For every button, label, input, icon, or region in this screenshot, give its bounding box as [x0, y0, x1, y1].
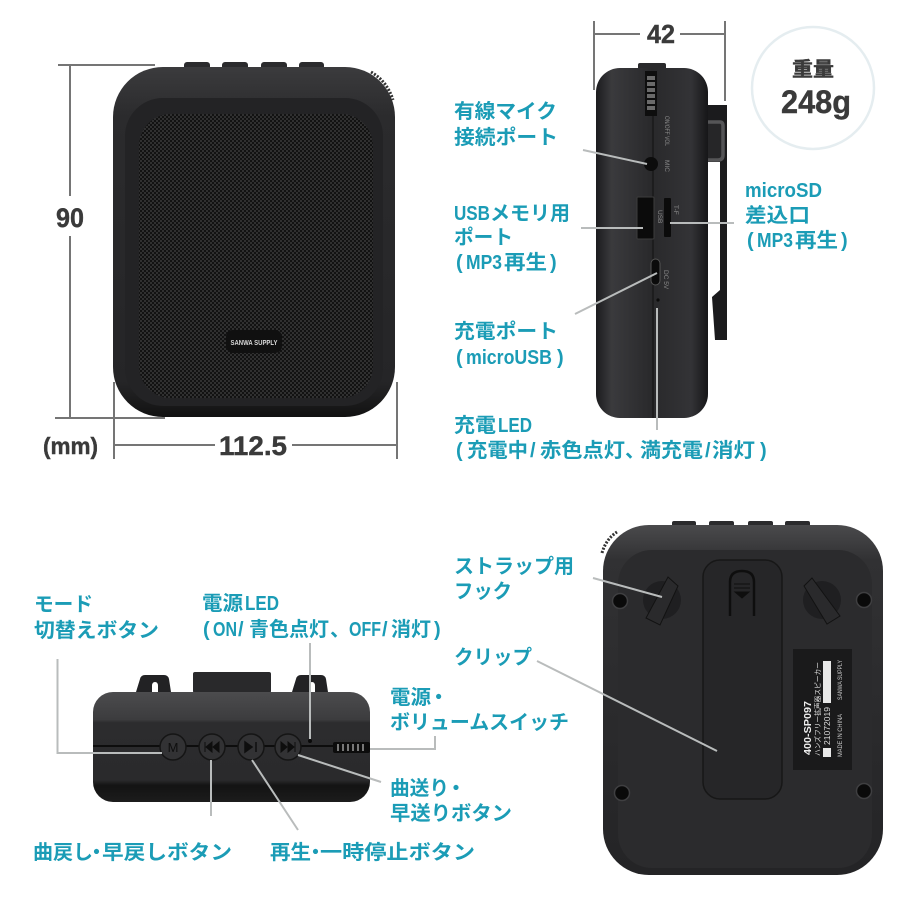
- callout: play pause button: 再生: [270, 841, 311, 864]
- callout: next button: [298, 755, 512, 825]
- side view: [594, 19, 727, 418]
- callout: mode button: [34, 594, 162, 753]
- belt clip: [703, 560, 782, 799]
- speaker side body: T-F: [672, 205, 679, 215]
- callout: charging LED: /: [530, 440, 536, 462]
- callout: power volume switch: ボリュームスイッチ: [390, 711, 569, 734]
- callout: previous button: 曲戻し: [33, 841, 93, 864]
- callout: play pause button: [252, 760, 475, 864]
- callout: next button: 早送りボタン: [390, 802, 512, 825]
- callout: clip: クリップ: [454, 646, 532, 669]
- mic jack: [644, 157, 658, 171]
- callout: power LED: OFF: [349, 619, 381, 641]
- button: mode: [160, 734, 186, 760]
- callout: USB memory port: ポート: [454, 226, 513, 249]
- callout: play pause button: 一時停止ボタン: [320, 841, 475, 864]
- speaker side body: USB: [656, 210, 663, 223]
- callout: charging LED: (: [456, 440, 463, 462]
- volume wheel: [645, 71, 657, 116]
- callout: charging LED: [454, 308, 767, 462]
- callout: strap hook: ストラップ用: [454, 555, 574, 578]
- callout: USB memory port: 再生: [504, 251, 547, 274]
- dimension: height 90: 90: [56, 203, 84, 233]
- callout: charging port: (: [456, 347, 463, 369]
- callout: power LED: 消灯: [391, 618, 431, 641]
- charge LED: [656, 298, 660, 302]
- dimension: width 112.5: [114, 382, 397, 461]
- speaker side body: [596, 63, 708, 418]
- callout: microSD slot: MP3: [757, 230, 793, 252]
- weight badge: [752, 27, 874, 149]
- button: previous: [199, 734, 225, 760]
- callout: power volume switch: ・: [429, 687, 449, 709]
- callout: power LED: (: [203, 619, 210, 641]
- callout: charging LED: 消灯: [712, 439, 755, 462]
- product label: [793, 649, 852, 770]
- callout: power LED: LED: [245, 593, 279, 615]
- callout: mode button: 切替えボタン: [34, 619, 159, 642]
- logo badge: [226, 330, 282, 353]
- callout: USB memory port: [454, 203, 643, 274]
- unit label mm: (mm): [43, 433, 98, 459]
- callout: USB memory port: MP3: [466, 252, 502, 274]
- weight badge: 重量: [792, 58, 834, 81]
- callout: power volume switch: 電源: [390, 686, 431, 709]
- callout: wired mic port: 有線マイク: [454, 100, 557, 123]
- callout: charging port: ): [557, 347, 564, 369]
- callout: microSD slot: microSD: [745, 180, 822, 202]
- callout: mode button: モード: [34, 594, 93, 616]
- callout: charging LED: ): [760, 440, 767, 462]
- product label: MADE IN CHINA: [837, 713, 844, 757]
- callout: microSD slot: ): [841, 230, 848, 252]
- USB port: [637, 197, 654, 239]
- callout: charging LED: 充電中: [467, 439, 528, 462]
- callout: power LED: 、: [330, 619, 350, 641]
- callout: wired mic port: [454, 100, 647, 164]
- callout: previous button: [33, 760, 232, 864]
- strap hooks: [643, 577, 841, 625]
- callout: power LED: /: [382, 619, 388, 641]
- power LED: [308, 739, 312, 743]
- callout: strap hook: [454, 555, 662, 603]
- strap hooks and clip top: [136, 672, 328, 693]
- callout: microSD slot: (: [747, 230, 754, 252]
- callout: charging LED: 充電: [454, 414, 496, 437]
- callout: USB memory port: ): [550, 252, 557, 274]
- callout: power LED: /: [238, 619, 244, 641]
- callout: next button: ・: [446, 778, 466, 800]
- back view: [602, 521, 883, 875]
- callout: power LED: ): [434, 619, 441, 641]
- logo badge: SANWA SUPPLY: [230, 338, 278, 347]
- top-edge view with buttons: [93, 672, 370, 802]
- callout: charging port: [454, 273, 657, 369]
- speaker side body: DC 5V: [662, 270, 669, 290]
- callout: charging port: microUSB: [466, 347, 552, 369]
- callout: charging LED: 赤色点灯: [540, 439, 625, 462]
- front view with dimensions: [43, 62, 397, 461]
- callout: charging LED: /: [705, 440, 711, 462]
- button: next: [275, 734, 301, 760]
- product label: 21072019: [823, 706, 832, 745]
- callout: wired mic port: 接続ポート: [454, 126, 558, 149]
- screw holes: [612, 592, 872, 800]
- callout: power LED: 電源: [202, 592, 243, 615]
- callout: power volume switch: [370, 686, 569, 749]
- dimension: depth 42: [594, 19, 725, 101]
- speaker side body: ON/OFF VOL: [663, 116, 670, 146]
- callout: power LED: 青色点灯: [249, 618, 329, 641]
- belt clip side: [708, 105, 727, 340]
- callout: charging LED: LED: [498, 415, 532, 437]
- product label: SANWA SUPPLY: [837, 659, 844, 700]
- volume switch: [333, 742, 370, 753]
- product label: ハンズフリー拡声器スピーカー: [813, 662, 822, 756]
- callout: next button: 曲送り: [390, 777, 449, 800]
- back body: [602, 521, 883, 875]
- callout: play pause button: ・: [306, 842, 326, 864]
- callout: microSD slot: 差込口: [745, 204, 810, 227]
- callout: USB memory port: (: [456, 252, 463, 274]
- device body: [93, 692, 370, 802]
- microSD slot: [664, 198, 671, 237]
- callout: USB memory port: メモリ用: [490, 203, 570, 225]
- button: play pause: [238, 734, 264, 760]
- callout: power LED: [202, 592, 441, 739]
- dimension: height 90: [55, 65, 165, 418]
- callout: microSD slot: [670, 180, 848, 252]
- micro USB port: [651, 259, 660, 285]
- speaker side body: MIC: [663, 160, 670, 172]
- callout: previous button: 早戻しボタン: [102, 841, 232, 864]
- callout: USB memory port: USB: [454, 203, 490, 225]
- callout: charging LED: 、: [625, 440, 645, 462]
- callout: microSD slot: 再生: [795, 229, 838, 252]
- callout: clip: [454, 646, 717, 751]
- product label: 400-SP097: [802, 701, 814, 755]
- weight badge: 248g: [781, 84, 851, 120]
- speaker front: [113, 62, 395, 417]
- callout: previous button: ・: [86, 842, 106, 864]
- dimension: width 112.5: 112.5: [219, 431, 287, 461]
- dimension: depth 42: 42: [647, 19, 675, 49]
- callout: strap hook: フック: [454, 580, 512, 603]
- callout: charging port: 充電ポート: [454, 320, 558, 343]
- callout: power LED: ON: [213, 619, 237, 641]
- button: mode: M: [168, 740, 178, 755]
- callout: charging LED: 満充電: [640, 439, 703, 462]
